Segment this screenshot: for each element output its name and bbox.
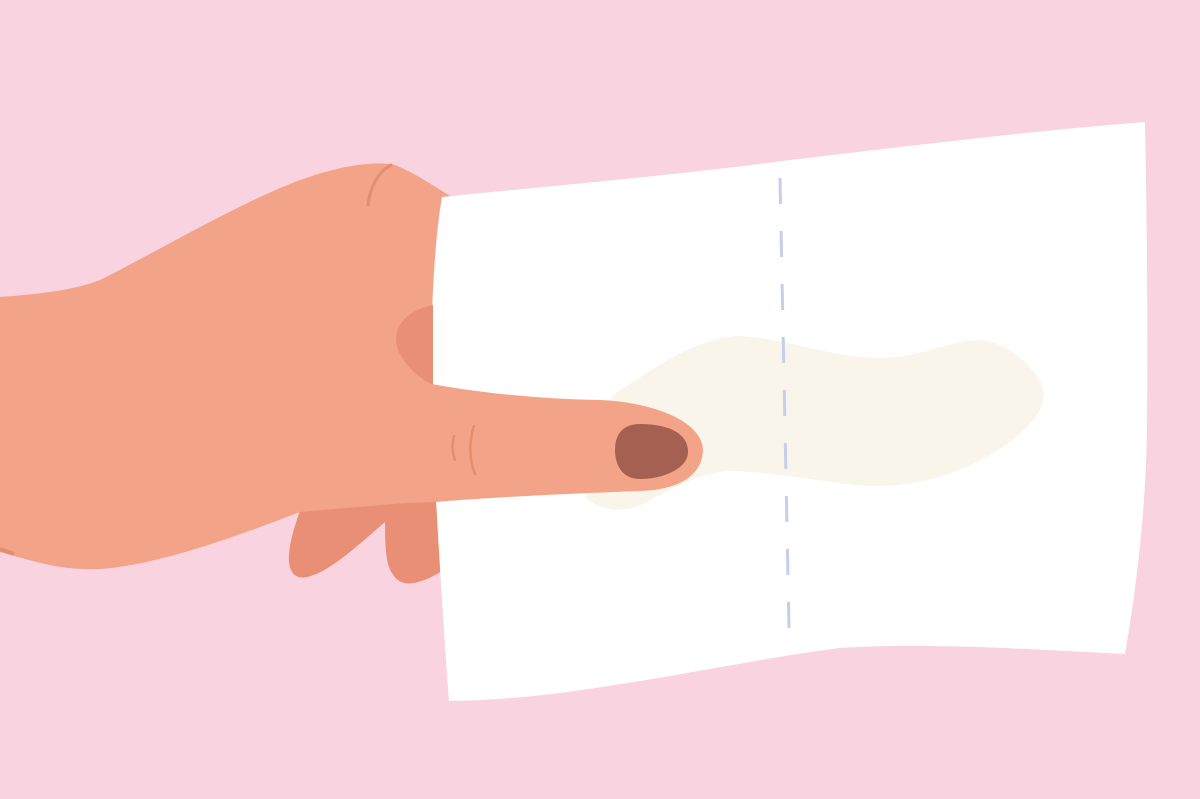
knuckle crease bbox=[368, 165, 391, 205]
icon: pointing thumb bbox=[360, 384, 703, 505]
icon: stain bbox=[585, 336, 1044, 510]
thumb knuckle creases bbox=[453, 426, 475, 474]
icon: hand back bbox=[0, 164, 452, 569]
dashed perforation line bbox=[780, 178, 789, 628]
icon: tissue paper bbox=[432, 122, 1147, 701]
icon: inner palm shade bbox=[396, 305, 433, 385]
icon: back fingers behind tissue bbox=[289, 490, 445, 583]
icon: thumbnail bbox=[615, 424, 688, 479]
wrist crease bbox=[0, 549, 14, 554]
